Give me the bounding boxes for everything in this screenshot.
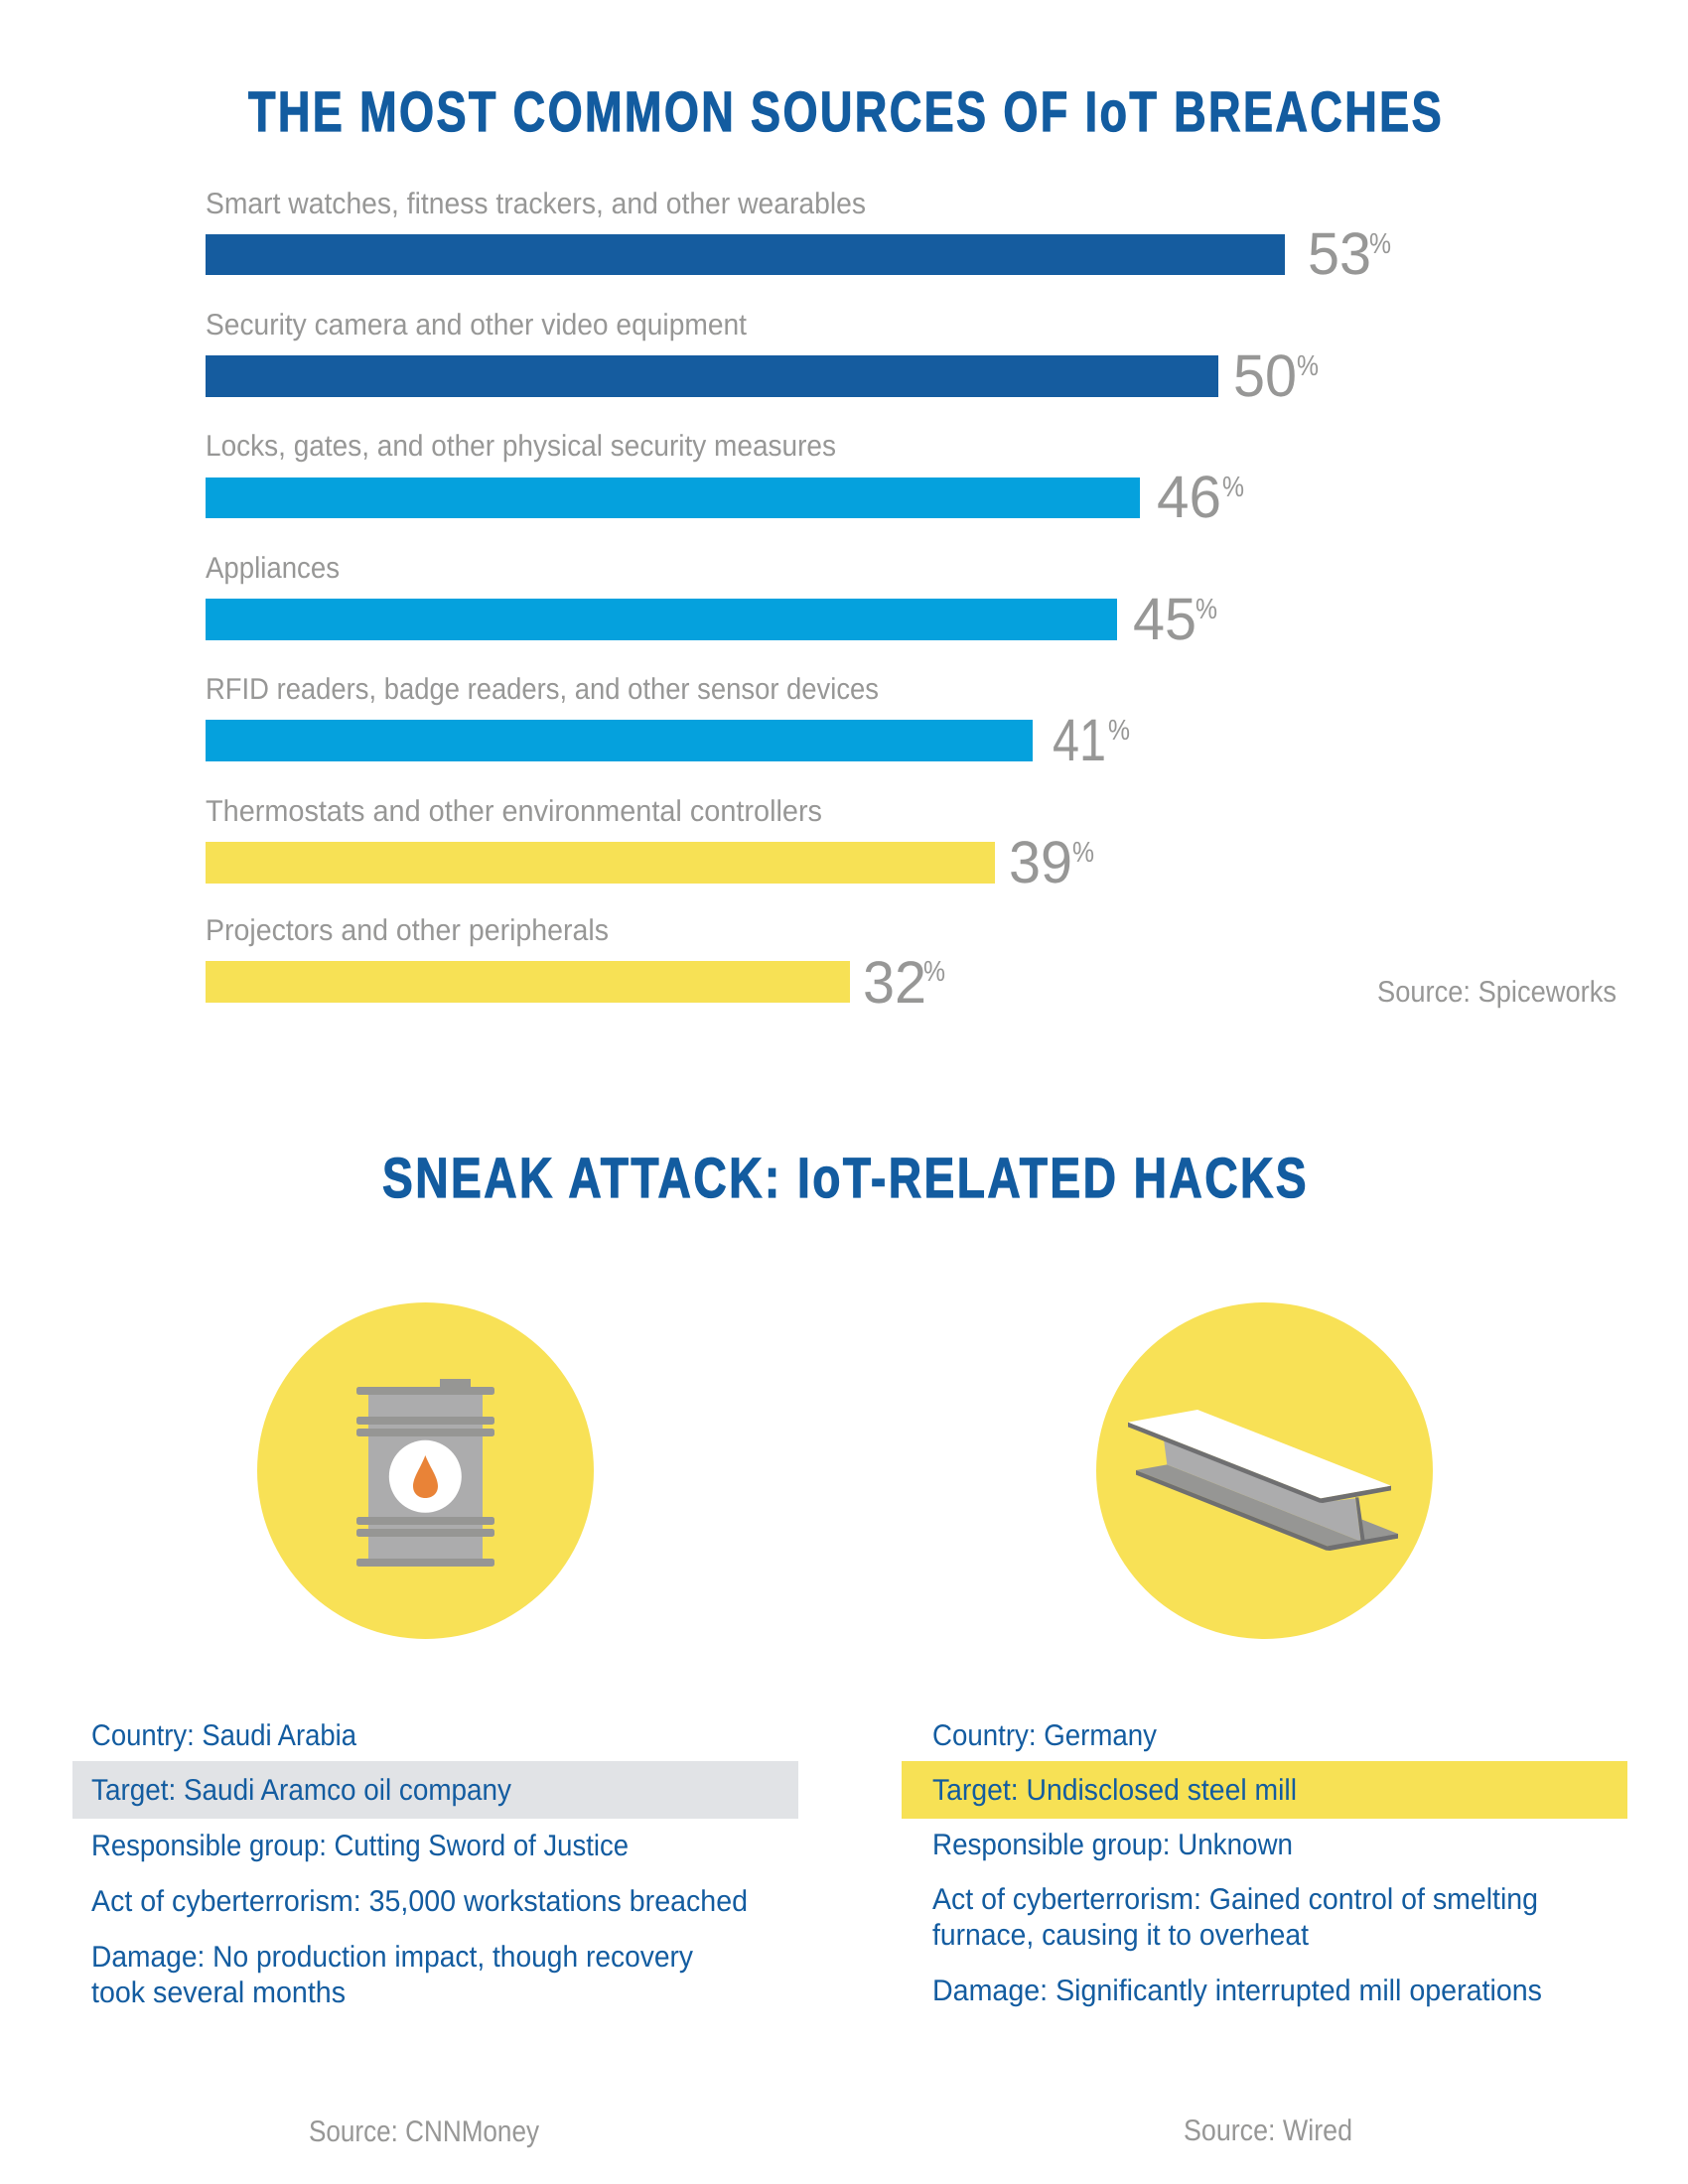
panel: Saudi Aramco hack details: Target: Saudi Aramco oil company — [91, 1774, 511, 1807]
bar row: locks and gates 46%: Locks, gates, and other physical security measures — [206, 430, 836, 463]
source: Wired: Source: Wired — [1184, 2115, 1352, 2147]
bar row: thermostats 39%: 39 — [1009, 829, 1072, 895]
highlight band: target — [902, 1761, 1627, 1819]
icon: oil barrel in yellow circle — [257, 1302, 594, 1639]
bar row: wearables 53%: % — [1369, 228, 1391, 260]
bar row: wearables 53%: 53 — [1308, 220, 1371, 287]
bar row: appliances 45%: % — [1196, 594, 1217, 625]
bar row: thermostats 39%: Thermostats and other environmental controllers — [206, 795, 822, 828]
source: CNNMoney: Source: CNNMoney — [309, 2116, 539, 2148]
panel: German steel mill hack details: Responsible group: Unknown — [932, 1829, 1293, 1861]
bar row: wearables 53%: Smart watches, fitness trackers, and other wearables — [206, 188, 866, 220]
bar row: RFID and sensors 41%: % — [1108, 715, 1130, 747]
panel: German steel mill hack details: Damage: Significantly interrupted mill operations — [932, 1975, 1542, 2007]
bar row: wearables 53% — [206, 188, 1391, 287]
bar row: appliances 45%: Appliances — [206, 552, 340, 585]
panel: German steel mill hack details: Act of cyberterrorism: Gained control of smelting — [932, 1883, 1538, 1916]
panel: German steel mill hack details — [902, 1719, 1627, 2007]
bar row: RFID and sensors 41% — [206, 673, 1130, 773]
heading: sneak attack: SNEAK ATTACK: IoT-RELATED HACKS — [382, 1147, 1309, 1210]
bar row: projectors 32%: 32 — [863, 949, 926, 1016]
bar row: security cameras 50%: 50 — [1233, 342, 1297, 409]
bar row: thermostats 39%: % — [1072, 837, 1094, 869]
source: Spiceworks: Source: Spiceworks — [1377, 976, 1617, 1009]
panel: German steel mill hack details: furnace, causing it to overheat — [932, 1919, 1310, 1952]
bar row: projectors 32%: % — [923, 956, 945, 988]
bar row: RFID and sensors 41%: 41 — [1053, 707, 1106, 773]
icon: steel beam in yellow circle — [1096, 1302, 1433, 1639]
bar row: RFID and sensors 41%: RFID readers, badge readers, and other sensor devices — [206, 673, 879, 706]
bar row: security cameras 50% — [206, 309, 1319, 409]
bar row: thermostats 39% — [206, 795, 1094, 895]
panel: Saudi Aramco hack details: Damage: No production impact, though recovery — [91, 1941, 693, 1974]
bar row: locks and gates 46% — [206, 430, 1244, 530]
panel: Saudi Aramco hack details: Country: Saudi Arabia — [91, 1719, 356, 1752]
bar row: appliances 45%: 45 — [1133, 586, 1196, 652]
panel: Saudi Aramco hack details: Responsible group: Cutting Sword of Justice — [91, 1830, 629, 1862]
highlight band: target — [72, 1761, 798, 1819]
bar row: locks and gates 46%: % — [1222, 472, 1244, 503]
bar row: appliances 45% — [206, 552, 1217, 652]
bar row: projectors 32% — [206, 914, 945, 1016]
panel: Saudi Aramco hack details: Act of cyberterrorism: 35,000 workstations breached — [91, 1885, 748, 1918]
bar row: security cameras 50%: Security camera and other video equipment — [206, 309, 748, 341]
bar row: locks and gates 46%: 46 — [1157, 464, 1221, 530]
bar row: security cameras 50%: % — [1297, 350, 1319, 382]
panel: Saudi Aramco hack details — [72, 1719, 798, 2009]
panel: Saudi Aramco hack details: took several months — [91, 1977, 346, 2009]
bar row: projectors 32%: Projectors and other peripherals — [206, 914, 609, 947]
panel: German steel mill hack details: Country: Germany — [932, 1719, 1157, 1752]
panel: German steel mill hack details: Target: Undisclosed steel mill — [932, 1774, 1297, 1807]
bar chart: sources of IoT breaches — [206, 188, 1391, 1016]
